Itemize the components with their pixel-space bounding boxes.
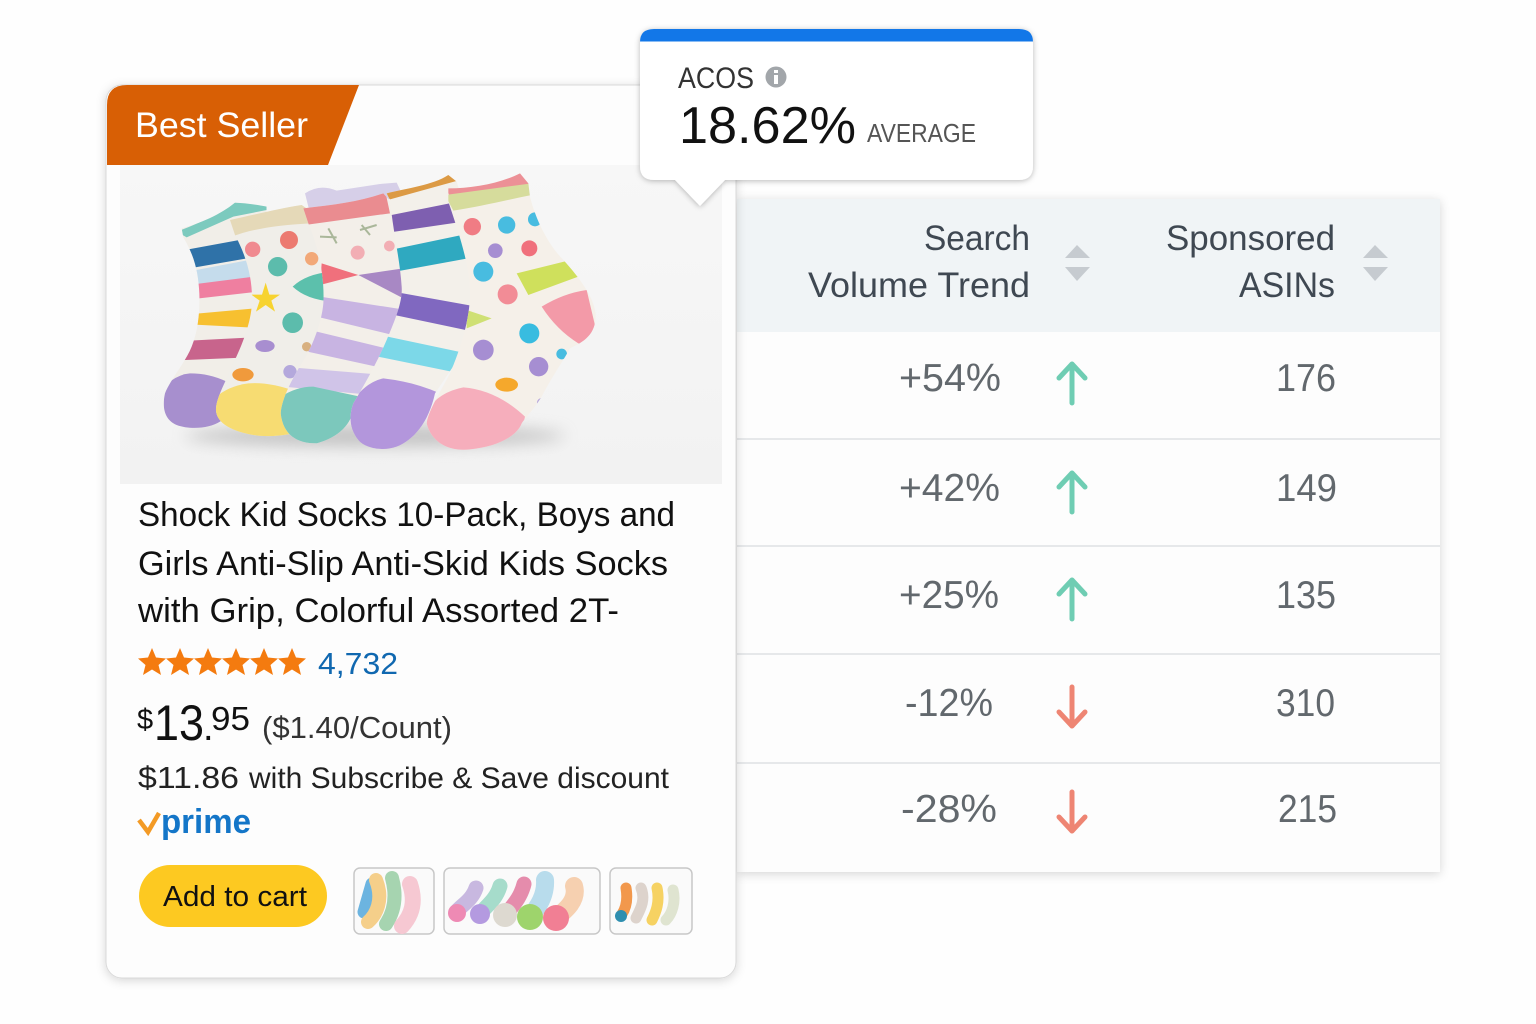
table row 1: 176 <box>1276 357 1336 400</box>
table row 4 <box>905 682 1335 726</box>
sock 3 <box>305 183 403 213</box>
icon: up arrow <box>1059 473 1085 512</box>
review count: 4,732 <box>318 646 398 681</box>
product title: with Grip, Colorful Assorted 2T- <box>137 592 619 630</box>
table row 4: 310 <box>1276 682 1335 725</box>
thumbnail 3 <box>610 868 692 934</box>
table row 1: +54% <box>899 357 1001 400</box>
button: add to cart: Add to cart <box>163 881 307 913</box>
icon: down arrow <box>1059 792 1085 831</box>
subscribe and save price: with Subscribe & Save discount <box>248 762 670 795</box>
thumbnail 2 <box>444 868 600 934</box>
table row 5: 215 <box>1278 788 1337 831</box>
price: . <box>203 707 214 749</box>
table row 1 <box>899 357 1336 403</box>
icon: up arrow <box>1059 364 1085 403</box>
table row 2: 149 <box>1276 467 1337 510</box>
callout: ACOS <box>640 29 1033 206</box>
icon: sort arrows sponsored asins <box>1363 245 1388 281</box>
prime logo: prime <box>161 803 251 841</box>
column heading: search volume trend <box>808 219 1030 305</box>
sock 4 <box>350 175 470 449</box>
column heading: sponsored asins <box>1166 219 1335 305</box>
icon: info <box>766 66 786 88</box>
product title <box>137 496 675 630</box>
table row 2 <box>899 467 1337 512</box>
column heading: search volume trend: Search <box>924 219 1030 258</box>
table row 3 <box>899 574 1336 619</box>
column heading: search volume trend: Volume Trend <box>808 266 1030 305</box>
table row 3: 135 <box>1276 574 1336 617</box>
callout value: 18.62% <box>679 97 856 155</box>
table row 5 <box>901 788 1337 831</box>
table row 5: -28% <box>901 788 997 831</box>
table row 4: -12% <box>905 682 993 725</box>
badge: best seller: Best Seller <box>135 106 308 145</box>
price: ($1.40/Count) <box>262 710 452 745</box>
column heading: sponsored asins: ASINs <box>1239 266 1335 305</box>
rating stars <box>138 648 306 675</box>
table row 2: +42% <box>899 467 1000 510</box>
badge: best seller <box>107 85 359 165</box>
icon: up arrow <box>1059 580 1085 619</box>
column heading: sponsored asins: Sponsored <box>1166 219 1335 258</box>
icon: sort arrows search volume <box>1065 245 1090 281</box>
subscribe and save price: $11.86 <box>138 760 239 795</box>
icon: down arrow <box>1059 687 1085 726</box>
price: 95 <box>211 700 250 737</box>
button: add to cart <box>139 865 327 927</box>
panel: product card <box>106 85 736 978</box>
product title: Shock Kid Socks 10-Pack, Boys and <box>138 496 675 534</box>
sock 1 <box>164 202 266 428</box>
price: $ <box>137 704 153 736</box>
panel: keyword table <box>737 199 1440 872</box>
product image: socks <box>120 165 722 484</box>
callout qualifier: AVERAGE <box>867 118 976 148</box>
callout label: ACOS <box>678 62 754 95</box>
product title: Girls Anti-Slip Anti-Skid Kids Socks <box>138 545 668 583</box>
table row 3: +25% <box>899 574 999 617</box>
price: 13 <box>154 695 204 751</box>
price <box>137 695 452 751</box>
thumbnail 1 <box>354 868 434 934</box>
sock 2 <box>216 205 324 436</box>
sock 5 <box>420 170 600 453</box>
table header <box>737 199 1440 332</box>
